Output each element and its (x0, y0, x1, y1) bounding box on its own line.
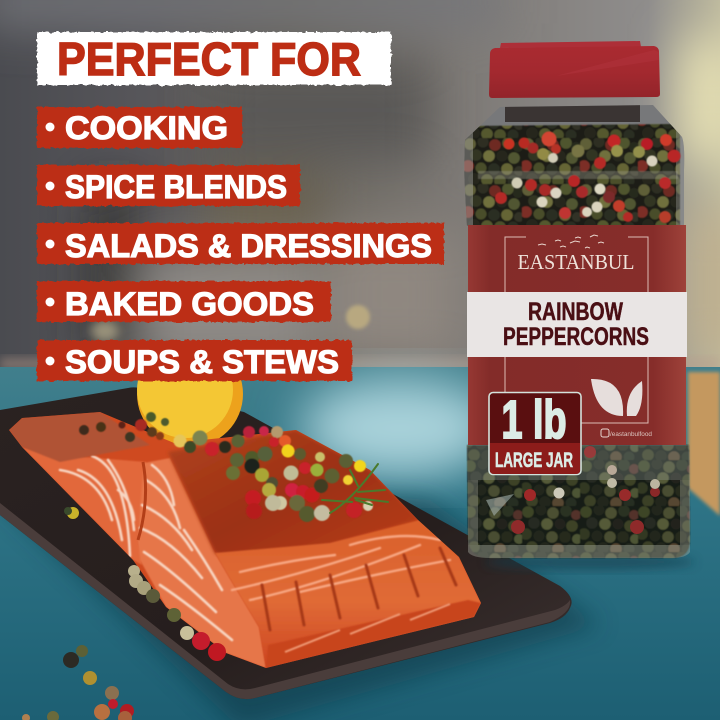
table: teal cloth (0, 367, 720, 720)
salmon base (9, 412, 481, 668)
salmon crust main (168, 430, 420, 560)
list item: cooking (37, 107, 242, 148)
peppercorn jar (460, 41, 695, 570)
list item: cooking: COOKING (65, 110, 228, 146)
social handle: /eastanbulfood (610, 431, 652, 438)
brand birds (538, 235, 604, 248)
salmon dark seam (138, 462, 146, 540)
peppercorns on plate (64, 507, 226, 661)
logo frame (505, 237, 648, 423)
weight badge (489, 390, 581, 474)
jar label (467, 225, 687, 445)
salmon crust left (9, 412, 150, 462)
icon: instagram (601, 429, 609, 437)
salmon lower block (215, 520, 481, 668)
background: blurred kitchen (0, 0, 720, 380)
list item: spice blends: SPICE BLENDS (65, 169, 287, 205)
product name line 2: PEPPERCORNS (503, 323, 649, 351)
jar glass and upper peppercorns (464, 105, 684, 226)
salmon bottom edge (266, 600, 481, 668)
list item: salads and dressings: SALADS & DRESSINGS (65, 228, 432, 264)
heading: perfect for: PERFECT FOR (57, 33, 361, 85)
rosemary sprig (322, 464, 388, 513)
salmon pale streaks (232, 536, 450, 600)
peppercorn garnish on salmon (79, 412, 373, 522)
white product band (467, 292, 687, 357)
icon: leaves (591, 379, 642, 416)
brand name: EASTANBUL (518, 250, 634, 274)
upper peppercorn highlights (478, 132, 680, 223)
list item: soups and stews: SOUPS & STEWS (65, 344, 339, 380)
salmon score marks (262, 548, 456, 630)
jar size: LARGE JAR (495, 449, 573, 472)
salmon second lobe (137, 458, 266, 668)
salmon muscle stripes (60, 456, 232, 640)
weight value: 1 lb (502, 390, 566, 450)
salmon first lobe (22, 447, 146, 565)
jar lower window (467, 445, 690, 558)
lower jar frost bands (467, 445, 690, 558)
salmon fillet (9, 412, 481, 668)
list item: baked goods: BAKED GOODS (65, 286, 314, 322)
lemon wedge (137, 341, 243, 447)
product name: RAINBOW (528, 298, 623, 326)
jar shadow (485, 554, 695, 570)
jar cap (489, 41, 660, 98)
plate (0, 387, 600, 720)
scattered peppercorns on table (22, 645, 134, 720)
